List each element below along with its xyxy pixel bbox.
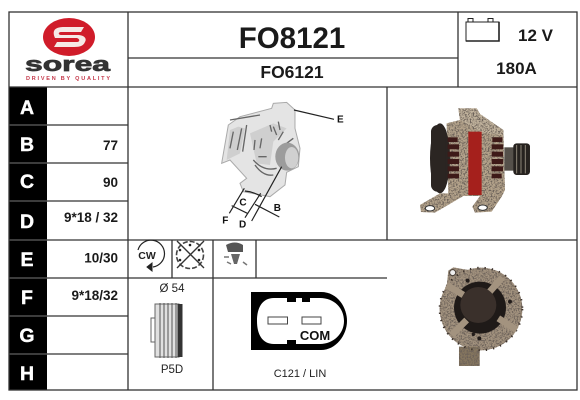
alternator line diagram with dimension labels: D (239, 220, 246, 231)
alternator line diagram with dimension labels: E (337, 114, 344, 125)
icon: clockwise rotation: CW (138, 250, 156, 262)
alternator line diagram with dimension labels (222, 102, 344, 231)
connector type: C121 / LIN (274, 368, 326, 380)
dimension values: 90 (103, 175, 118, 190)
letter column (9, 87, 47, 390)
logo: sorea: sorea (25, 54, 111, 76)
pulley type: P5D (161, 364, 183, 376)
icon: regulator part (224, 242, 247, 265)
pulley drawing (151, 303, 182, 358)
photo: alternator rear view (440, 267, 522, 366)
letter column: D (20, 211, 34, 233)
letter column: A (20, 97, 34, 119)
alternator line diagram with dimension labels: F (222, 216, 228, 227)
dimension values (64, 138, 118, 303)
dimension values: 9*18/32 (71, 288, 118, 303)
letter column: G (19, 325, 35, 347)
pulley diameter: Ø 54 (160, 283, 185, 295)
secondary part number: FO6121 (260, 62, 324, 82)
icon: battery (466, 18, 499, 41)
voltage: 12 V (518, 26, 554, 45)
alternator line diagram with dimension labels: C (239, 198, 247, 209)
letter column: H (20, 363, 34, 385)
letter column: C (20, 171, 34, 193)
icon: crossed-out connector (176, 241, 204, 268)
amperage: 180A (496, 59, 537, 78)
logo: sorea: DRIVEN BY QUALITY (26, 76, 110, 82)
photo: alternator side view (420, 108, 530, 213)
icon: clockwise rotation (138, 240, 164, 271)
alternator line diagram with dimension labels: B (274, 203, 281, 214)
dimension values: 9*18 / 32 (64, 210, 118, 225)
connector diagram (251, 292, 347, 350)
letter column: F (21, 287, 33, 309)
letter column: E (20, 249, 34, 271)
dimension values: 77 (103, 138, 118, 153)
logo: sorea (25, 18, 111, 82)
letter column: B (20, 134, 34, 156)
connector diagram: COM (300, 328, 330, 343)
dimension values: 10/30 (84, 250, 118, 266)
part number: FO8121 (239, 22, 345, 55)
